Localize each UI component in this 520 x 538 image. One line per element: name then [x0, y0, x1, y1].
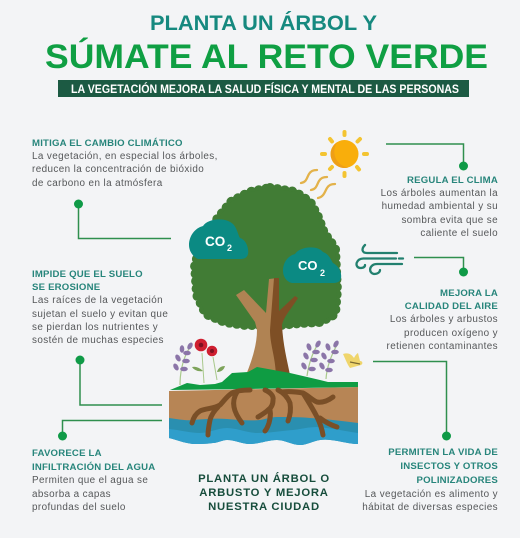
connector: regula	[386, 144, 468, 170]
text block: regula el clima: caliente el suelo	[420, 228, 498, 239]
text block: regula el clima: Los árboles aumentan la	[381, 188, 498, 199]
text block: permiten la vida: hábitat de diversas especies	[362, 502, 498, 513]
ground cross-section	[169, 367, 358, 445]
text block: impide que el suelo se erosione: sostén de muchas especies	[32, 335, 164, 346]
connector: permiten	[373, 362, 451, 440]
crown fill	[195, 188, 337, 325]
icon: CO2 cloud left	[189, 219, 248, 259]
subtitle banner: LA VEGETACIÓN MEJORA LA SALUD FÍSICA Y MENTAL DE LAS PERSONAS	[71, 83, 459, 96]
text block: favorece la infiltración: FAVORECE LA	[32, 448, 102, 459]
text block: mejora la calidad del aire: CALIDAD DEL AIRE	[405, 301, 498, 312]
connector: mitiga	[74, 200, 171, 238]
text block: mejora la calidad del aire: MEJORA LA	[440, 288, 498, 299]
title: line 2: SÚMATE AL RETO VERDE	[45, 38, 488, 76]
text block: mitiga el cambio climático	[32, 137, 218, 189]
grass	[170, 367, 358, 390]
tree trunk	[236, 278, 298, 375]
text block: favorece la infiltración: INFILTRACIÓN DEL AGUA	[32, 461, 155, 473]
text block: favorece la infiltración: profundas del suelo	[32, 502, 126, 513]
text block: favorece la infiltración: absorba a capas	[32, 489, 111, 500]
text block: regula el clima: humedad ambiental y su	[382, 201, 498, 212]
icon: lavender left	[172, 342, 194, 385]
tree	[195, 188, 337, 375]
text block: permiten la vida: PERMITEN LA VIDA DE	[388, 447, 498, 458]
icon: lavender right	[300, 340, 340, 379]
water light layer	[169, 427, 358, 445]
icon: red flowers	[192, 339, 225, 383]
icon: wind	[357, 245, 403, 274]
subtitle banner	[58, 80, 469, 97]
text block: permiten la vida: INSECTOS Y OTROS	[400, 461, 498, 472]
connector: impide	[76, 356, 162, 405]
text block: mitiga el cambio climático: MITIGA EL CAMBIO CLIMÁTICO	[32, 137, 183, 149]
text block: impide que el suelo se erosione: sujetan el suelo y evitan que	[32, 309, 168, 320]
tree crown	[195, 188, 337, 325]
text block: impide que el suelo se erosione: SE EROSIONE	[32, 282, 101, 293]
water deep layer	[169, 417, 358, 445]
closing message: NUESTRA CIUDAD	[208, 501, 320, 513]
text block: permiten la vida	[362, 447, 498, 513]
text block: mitiga el cambio climático: de carbono en la atmósfera	[32, 178, 163, 189]
icon: CO2 cloud left: 2	[227, 243, 232, 253]
soil	[169, 387, 358, 430]
icon: CO2 cloud left: CO	[205, 234, 225, 249]
roots	[192, 390, 337, 435]
text block: mitiga el cambio climático: La vegetación, en especial los árboles,	[32, 151, 218, 162]
text block: mejora la calidad del aire	[387, 288, 498, 352]
text block: permiten la vida: POLINIZADORES	[416, 475, 498, 486]
text block: regula el clima: REGULA EL CLIMA	[407, 175, 498, 186]
text block: impide que el suelo se erosione	[32, 269, 168, 346]
text block: mejora la calidad del aire: producen oxígeno y	[404, 328, 498, 339]
text block: mitiga el cambio climático: reducen la concentración de bióxido	[32, 164, 204, 175]
text block: impide que el suelo se erosione: Las raíces de la vegetación	[32, 295, 163, 306]
text block: mejora la calidad del aire: Los árboles y arbustos	[390, 314, 498, 325]
text block: favorece la infiltración: Permiten que el agua se	[32, 475, 148, 486]
icon: CO2 cloud right: CO	[298, 258, 318, 273]
text block: permiten la vida: La vegetación es alimento y	[365, 489, 498, 500]
text block: impide que el suelo se erosione: se pierdan los nutrientes y	[32, 322, 158, 333]
icon: CO2 cloud right	[283, 247, 341, 283]
connector: mejora	[414, 258, 468, 276]
text block: regula el clima: sombra evita que se	[401, 215, 498, 226]
icon: sun	[322, 132, 367, 176]
text block: impide que el suelo se erosione: IMPIDE QUE EL SUELO	[32, 269, 143, 280]
connector: favorece	[58, 420, 162, 440]
text block: favorece la infiltración	[32, 448, 155, 513]
icon: CO2 cloud right: 2	[320, 268, 325, 278]
icon: heat waves	[301, 170, 335, 198]
text block: mejora la calidad del aire: retienen contaminantes	[387, 341, 498, 352]
closing message	[198, 472, 330, 513]
text block: regula el clima	[381, 175, 498, 239]
closing message: PLANTA UN ÁRBOL O	[198, 472, 330, 485]
title: line 1: PLANTA UN ÁRBOL Y	[150, 10, 377, 35]
icon: butterfly	[343, 353, 362, 368]
closing message: ARBUSTO Y MEJORA	[199, 487, 329, 499]
